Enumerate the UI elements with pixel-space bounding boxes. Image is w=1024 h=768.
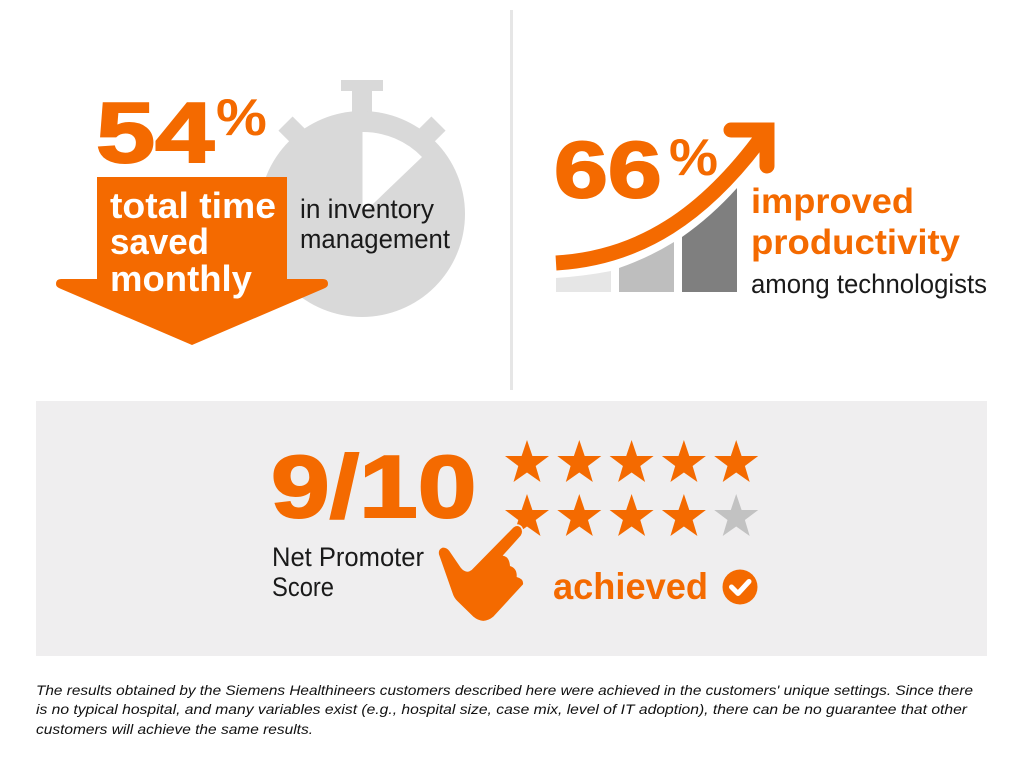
bar chart: rising bars bbox=[556, 188, 737, 292]
label: Net Promoter Score bbox=[272, 542, 424, 602]
label: in inventory management bbox=[300, 194, 450, 254]
disclaimer text bbox=[36, 682, 973, 737]
panel: net promoter score bbox=[36, 401, 987, 656]
statistic: 54 percent: 54 bbox=[96, 86, 214, 181]
icon: pointing hand bbox=[439, 526, 523, 621]
statistic: 9/10: 9/10 bbox=[271, 437, 477, 536]
label: improved productivity: productivity bbox=[751, 223, 961, 262]
icon: stopwatch bbox=[259, 80, 465, 317]
disclaimer text: is no typical hospital, and many variables exist (e.g., hospital size, case mix, level of IT adoption), there can be no guarantee that other bbox=[36, 701, 968, 717]
label: achieved: achieved bbox=[553, 566, 708, 607]
label: improved productivity bbox=[751, 182, 961, 262]
label: total time saved monthly: saved bbox=[110, 221, 209, 262]
label: total time saved monthly bbox=[110, 185, 276, 299]
label: in inventory management: management bbox=[300, 224, 450, 254]
disclaimer text: customers will achieve the same results. bbox=[36, 721, 313, 737]
label: among technologists: among technologists bbox=[751, 269, 987, 299]
disclaimer text: The results obtained by the Siemens Healthineers customers described here were achieved in the customers' unique settings. Since there bbox=[36, 682, 973, 698]
label: improved productivity: improved bbox=[751, 182, 914, 221]
label: in inventory management: in inventory bbox=[300, 194, 434, 224]
icon: star rating bbox=[505, 440, 758, 536]
label: total time saved monthly: total time bbox=[110, 185, 276, 226]
panel: productivity bbox=[554, 125, 987, 299]
icon: check mark bbox=[722, 570, 758, 604]
panel background bbox=[36, 401, 987, 656]
panel: time saved bbox=[56, 80, 465, 345]
label: Net Promoter Score: Score bbox=[272, 572, 334, 602]
icon: down arrow bbox=[56, 177, 328, 345]
percent sign: % bbox=[216, 88, 267, 146]
label: Net Promoter Score: Net Promoter bbox=[272, 542, 424, 572]
arrow: rising curve bbox=[556, 130, 767, 263]
percent sign: % bbox=[669, 128, 718, 187]
label: total time saved monthly: monthly bbox=[110, 258, 252, 299]
statistic: 66 percent: 66 bbox=[554, 125, 662, 214]
